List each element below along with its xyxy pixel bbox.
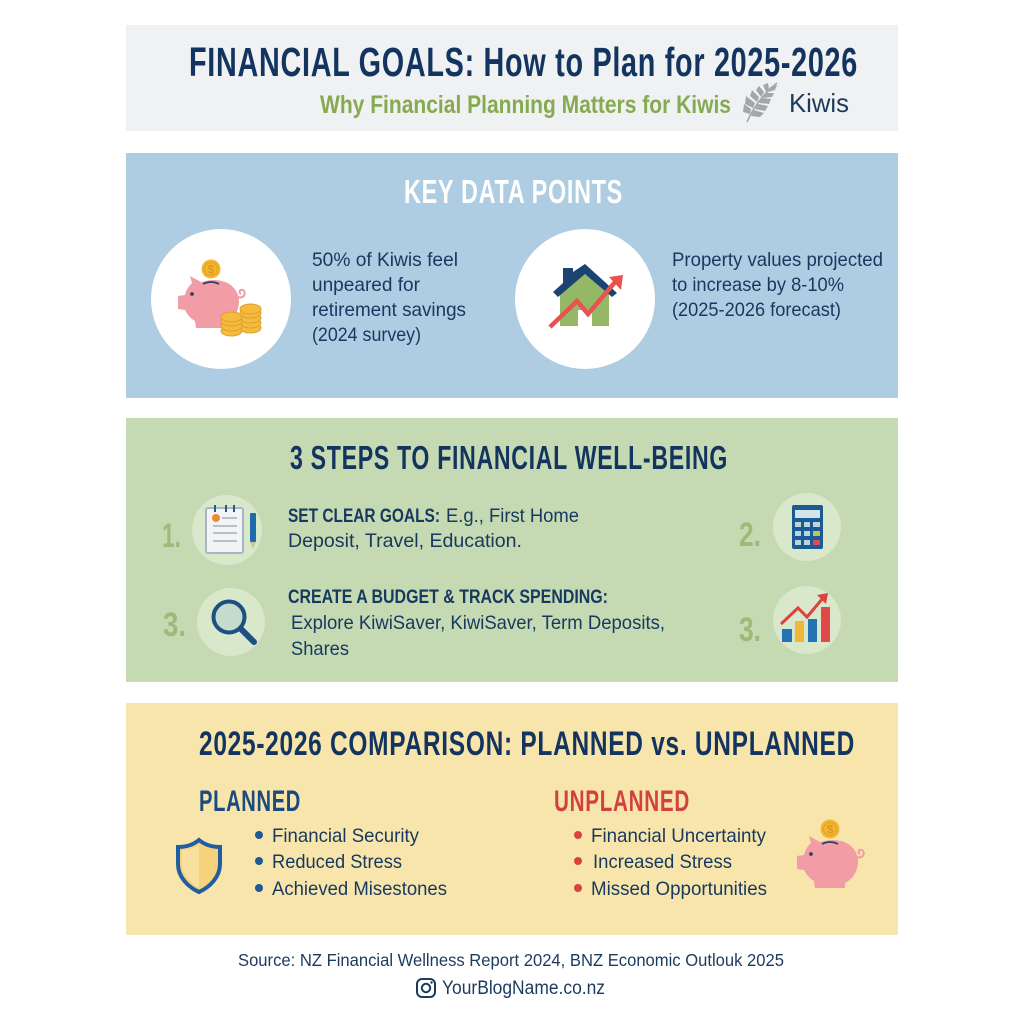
text: retirement statistic: retirement savings	[312, 299, 466, 321]
list: unplanned risks	[574, 825, 767, 900]
list: planned benefits: Achieved Misestones	[272, 878, 447, 900]
text: step set clear goals: Deposit, Travel, Education.	[288, 530, 522, 552]
icon: piggy bank	[797, 820, 864, 888]
heading: steps: 3 STEPS TO FINANCIAL WELL-BEING	[290, 439, 728, 476]
icon: magnifying glass	[197, 588, 265, 656]
step number 1: 1.	[162, 517, 181, 555]
subtitle: Why Financial Planning Matters for Kiwis	[320, 91, 731, 119]
text: step create a budget: Explore KiwiSaver, KiwiSaver, Term Deposits,	[291, 612, 665, 634]
heading: planned: PLANNED	[199, 785, 301, 818]
text: step set clear goals	[288, 505, 579, 552]
step number 2: 2.	[739, 516, 761, 554]
text: retirement statistic: (2024 survey)	[312, 324, 421, 346]
text: property statistic	[672, 249, 883, 321]
step number 3 left: 3.	[163, 606, 186, 644]
icon: house with rising arrow	[515, 229, 655, 369]
text: property statistic: (2025-2026 forecast)	[672, 299, 841, 321]
text: retirement statistic: unpeared for	[312, 274, 420, 296]
list: planned benefits: Financial Security	[272, 825, 419, 847]
list: unplanned risks: Increased Stress	[593, 851, 732, 873]
text: retirement statistic: 50% of Kiwis feel	[312, 249, 458, 271]
icon: piggy bank with coins: $	[208, 262, 215, 276]
list: unplanned risks: Missed Opportunities	[591, 878, 767, 900]
list: planned benefits: Reduced Stress	[272, 851, 402, 873]
text: step set clear goals: SET CLEAR GOALS:	[288, 506, 440, 527]
icon: shield	[178, 840, 220, 892]
icon: piggy bank with coins	[151, 229, 291, 369]
text: retirement statistic	[312, 249, 466, 346]
list: unplanned risks: Financial Uncertainty	[591, 825, 766, 847]
icon: silver fern	[743, 83, 777, 122]
icon: notepad and pen	[192, 495, 262, 565]
panel: three steps	[126, 418, 898, 682]
heading: unplanned: UNPLANNED	[554, 785, 690, 818]
text: property statistic: Property values projected	[672, 249, 883, 271]
text: step create a budget: CREATE A BUDGET & TRACK SPENDING:	[288, 587, 608, 608]
brand label: Kiwis	[789, 88, 849, 118]
text: property statistic: to increase by 8-10%	[672, 274, 844, 296]
text: step create a budget	[288, 587, 665, 660]
blog name: YourBlogName.co.nz	[442, 978, 605, 999]
panel: comparison	[126, 703, 898, 935]
text: step create a budget: Shares	[291, 638, 349, 660]
step number 3 right: 3.	[739, 611, 761, 649]
text: step set clear goals: E.g., First Home	[446, 505, 579, 527]
list: planned benefits	[255, 825, 447, 900]
icon: bar chart with rising arrow	[773, 586, 841, 654]
icon: piggy bank: $	[827, 822, 834, 836]
panel: header	[126, 25, 898, 131]
source line: Source: NZ Financial Wellness Report 2024, BNZ Economic Outlouk 2025	[238, 950, 784, 970]
panel: key data points	[126, 153, 898, 398]
heading: key data points: KEY DATA POINTS	[404, 173, 623, 210]
icon: instagram	[417, 979, 435, 997]
icon: calculator	[773, 493, 841, 561]
